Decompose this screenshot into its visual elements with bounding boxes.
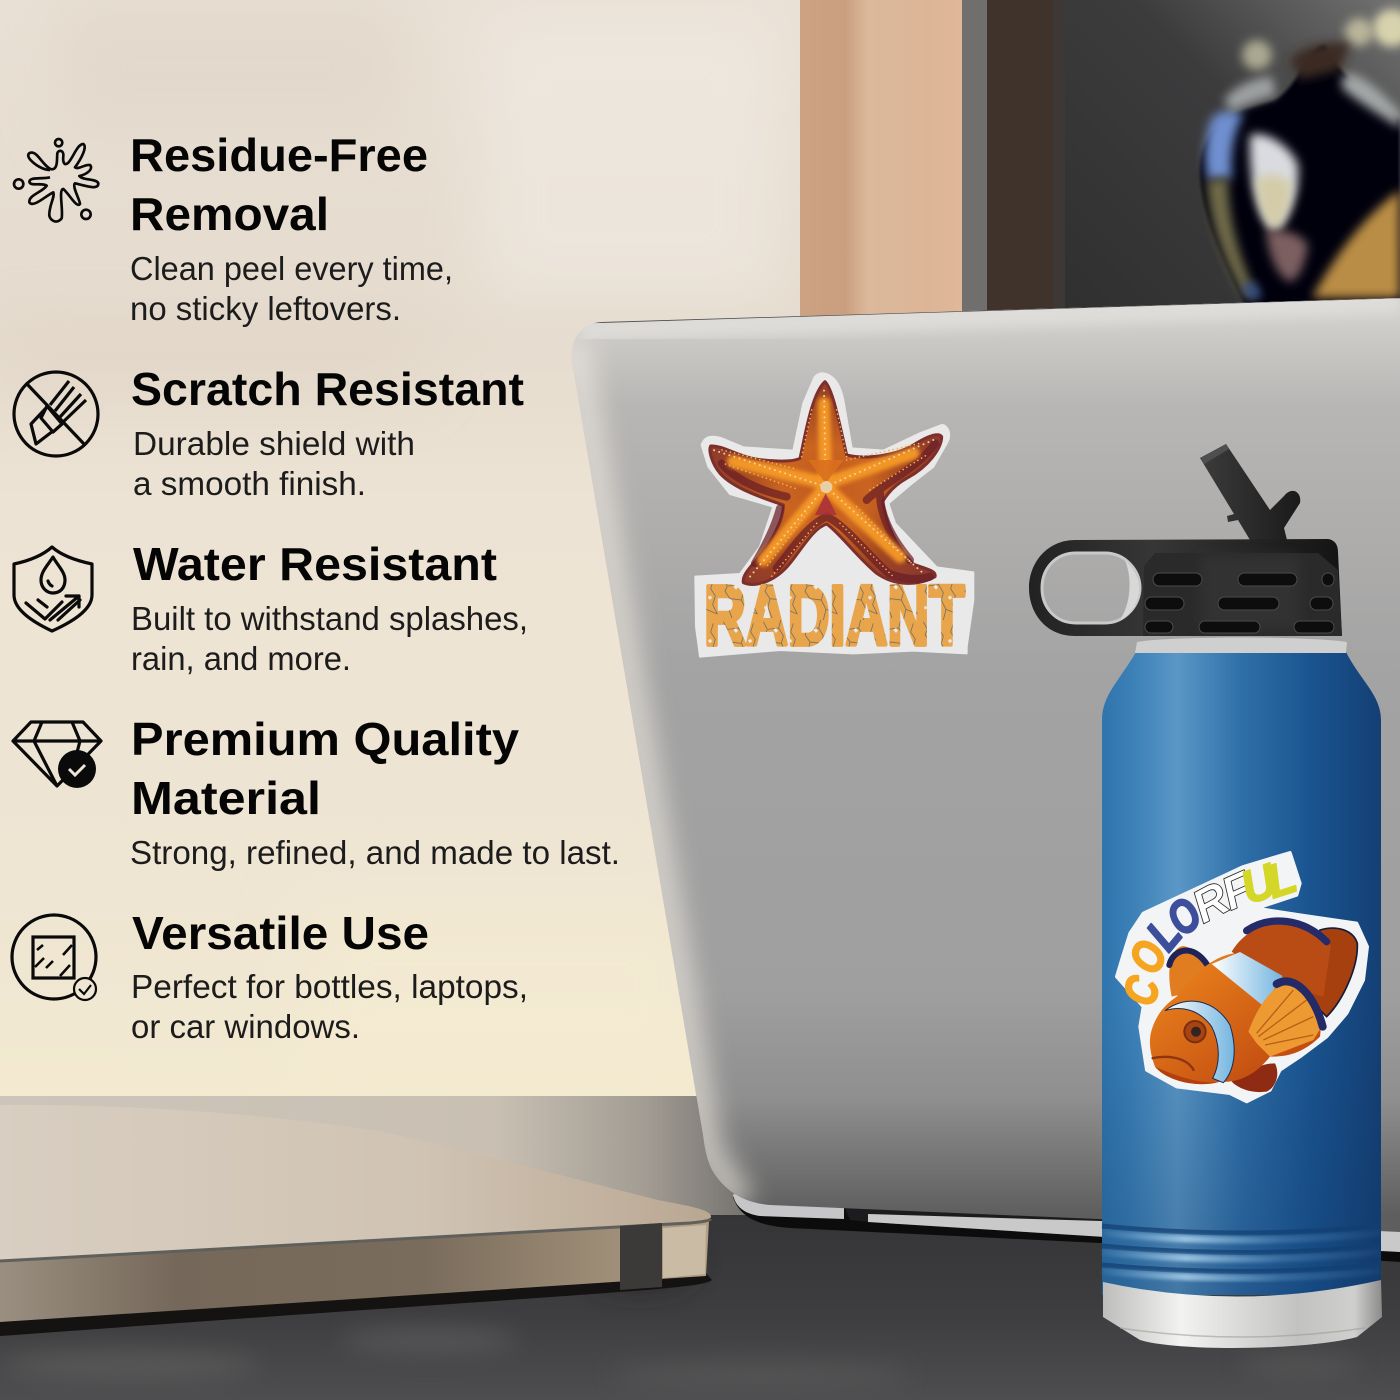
description: Built to withstand splashes, xyxy=(131,600,528,637)
heading: Versatile Use xyxy=(132,907,429,959)
sticker backing xyxy=(1117,853,1367,1102)
COLORFUL lettering: F xyxy=(1213,860,1262,920)
icon: diamond with check xyxy=(13,722,101,788)
feature: Scratch Resistant xyxy=(14,363,524,502)
icon: shield with water drop xyxy=(14,547,92,631)
bottle cap xyxy=(1029,539,1342,636)
bottle ribs xyxy=(1102,1226,1381,1278)
COLORFUL lettering: U xyxy=(1234,853,1285,914)
feature: Water Resistant xyxy=(14,538,528,677)
heading: Water Resistant xyxy=(133,538,497,590)
icon: window with check xyxy=(12,915,96,1000)
laptop lid xyxy=(560,290,1400,1240)
clownfish xyxy=(1150,921,1357,1092)
bottle body xyxy=(1102,652,1381,1295)
heading: Scratch Resistant xyxy=(131,363,524,415)
COLORFUL lettering: L xyxy=(1137,908,1192,960)
heading line 2: Material xyxy=(131,772,321,824)
notebook xyxy=(0,1105,712,1336)
COLORFUL lettering: L xyxy=(1260,850,1303,908)
feature: Residue-Free Removal xyxy=(14,129,453,327)
bottle shading xyxy=(1102,1000,1381,1295)
heading: Residue-Free xyxy=(130,129,428,181)
description line 2: no sticky leftovers. xyxy=(130,290,401,327)
description: Durable shield with xyxy=(133,425,415,462)
description line 2: a smooth finish. xyxy=(133,465,366,502)
background: dark room right xyxy=(962,0,1400,330)
icon: splat xyxy=(14,139,98,221)
bottle base xyxy=(1103,1280,1382,1348)
background: table xyxy=(0,1215,1400,1400)
description line 2: or car windows. xyxy=(131,1008,360,1045)
COLORFUL lettering: R xyxy=(1183,871,1238,933)
description: Clean peel every time, xyxy=(130,250,453,287)
feature: Premium Quality Material xyxy=(13,713,620,871)
laptop base xyxy=(733,1194,1400,1262)
heading line 2: Removal xyxy=(130,188,329,240)
icon: no scratch xyxy=(14,372,98,456)
starfish xyxy=(710,382,942,584)
sticker: COLORFUL clownfish xyxy=(1112,850,1367,1102)
bottle straw xyxy=(1200,444,1300,540)
description line 2: rain, and more. xyxy=(131,640,351,677)
description: Perfect for bottles, laptops, xyxy=(131,968,528,1005)
background: black vase xyxy=(1200,9,1400,305)
COLORFUL lettering: O xyxy=(1156,887,1211,946)
description: Strong, refined, and made to last. xyxy=(130,834,620,871)
sticker: RADIANT starfish xyxy=(695,373,973,663)
COLORFUL lettering: C xyxy=(1112,970,1170,1011)
heading: Premium Quality xyxy=(131,713,519,765)
COLORFUL lettering: O xyxy=(1118,932,1178,982)
bottle neck ring xyxy=(1135,638,1347,653)
sticker backing xyxy=(695,373,973,657)
COLORFUL lettering xyxy=(1112,850,1303,1011)
RADIANT lettering: RADIANT xyxy=(704,569,965,663)
feature: Versatile Use xyxy=(12,907,528,1045)
water bottle xyxy=(1029,444,1382,1348)
background: wall strip below window xyxy=(0,1096,760,1246)
background: wood frame xyxy=(800,0,962,330)
background: blurred window xyxy=(0,0,830,1110)
